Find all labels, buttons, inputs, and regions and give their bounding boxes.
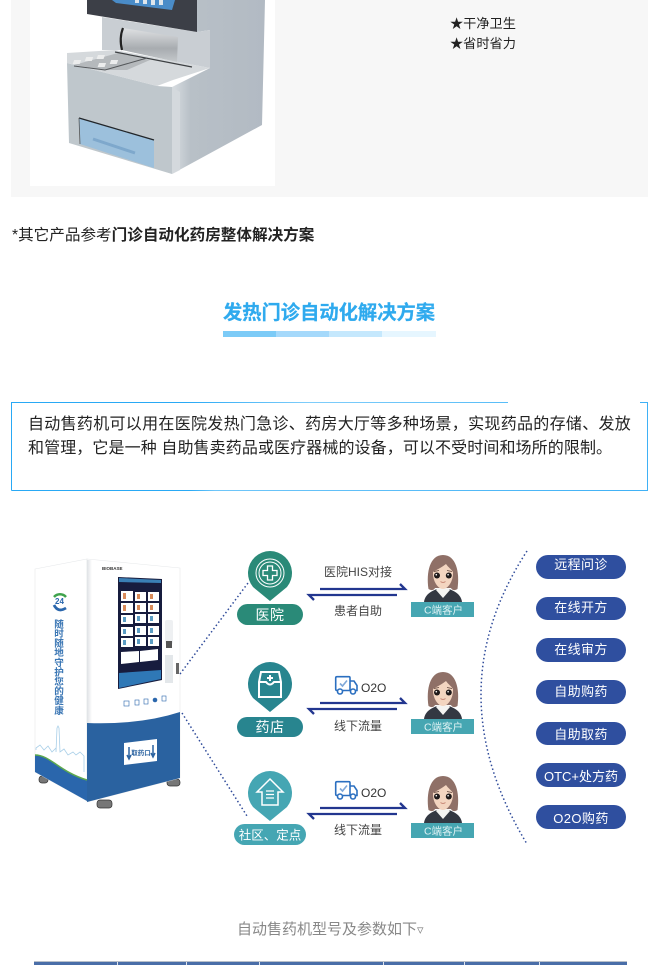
illustration: vending machine <box>35 559 180 808</box>
feature list <box>450 16 516 51</box>
payment modules <box>165 620 179 683</box>
service pills: 远程问诊 <box>554 557 608 572</box>
service pills: OTC+处方药 <box>544 769 618 784</box>
wheels <box>39 776 180 808</box>
pill: pharmacy <box>237 717 303 737</box>
connector: machine to hospital <box>180 583 248 674</box>
customer 2: C端客户 <box>424 720 463 734</box>
pin: hospital <box>248 551 292 601</box>
row 1 link: 患者自助 <box>334 604 382 618</box>
service pills <box>536 555 626 829</box>
row 2 link: 线下流量 <box>334 719 382 733</box>
pill: community: 社区、定点 <box>239 828 301 842</box>
table caption: 自动售药机型号及参数如下▿ <box>237 921 424 938</box>
pill: community <box>234 824 306 845</box>
logo: 24 <box>55 597 64 606</box>
heading: 发热门诊自动化解决方案 <box>223 301 435 324</box>
service pills: O2O购药 <box>553 811 609 826</box>
row 1 link <box>309 564 405 618</box>
customer 3 <box>411 776 474 838</box>
slogan: 随时随地守护您的健康 <box>52 618 64 715</box>
feature list: ★省时省力 <box>450 36 516 51</box>
pin: community <box>248 771 292 821</box>
service pills: 在线审方 <box>554 642 608 657</box>
connector: machine to community <box>182 713 247 816</box>
dotted arc <box>481 551 527 844</box>
service pills: 自助购药 <box>554 684 608 699</box>
intro text box: 和管理，它是一种 自助售卖药品或医疗器械的设备，可以不受时间和场所的限制。 <box>28 439 612 457</box>
pill: hospital: 医院 <box>256 607 284 623</box>
intro text box: 自动售药机可以用在医院发热门急诊、药房大厅等多种场景，实现药品的存储、发放 <box>28 415 631 433</box>
service pills: 在线开方 <box>554 600 608 615</box>
row 3 link <box>309 782 405 837</box>
pill: hospital <box>237 604 303 625</box>
illustration: dispensing machine <box>67 0 265 174</box>
pin: pharmacy <box>248 662 292 712</box>
brand: BIOBASE <box>102 566 123 571</box>
intro text box <box>12 402 648 490</box>
customer 2 <box>411 672 474 734</box>
logo <box>54 594 66 610</box>
parameter table header <box>34 961 627 965</box>
row 3 link: 线下流量 <box>334 823 382 837</box>
pickup sign: 取药口 <box>131 748 151 757</box>
row 3 link: O2O <box>361 786 386 800</box>
row 1 link: 医院HIS对接 <box>324 564 392 579</box>
customer 3: C端客户 <box>424 824 463 838</box>
customer 1 <box>411 555 474 617</box>
panel: product showcase <box>11 0 648 197</box>
pickup sign <box>124 739 157 765</box>
note: other products: *其它产品参考门诊自动化药房整体解决方案 <box>12 225 315 244</box>
service pills: 自助取药 <box>554 727 608 742</box>
feature list: ★干净卫生 <box>450 16 516 31</box>
purchase steps <box>124 696 166 706</box>
touch screen <box>118 577 162 689</box>
customer 1: C端客户 <box>424 604 463 616</box>
row 2 link <box>309 677 405 733</box>
row 2 link: O2O <box>361 681 386 695</box>
pill: pharmacy: 药店 <box>256 719 284 735</box>
heading <box>223 301 436 337</box>
